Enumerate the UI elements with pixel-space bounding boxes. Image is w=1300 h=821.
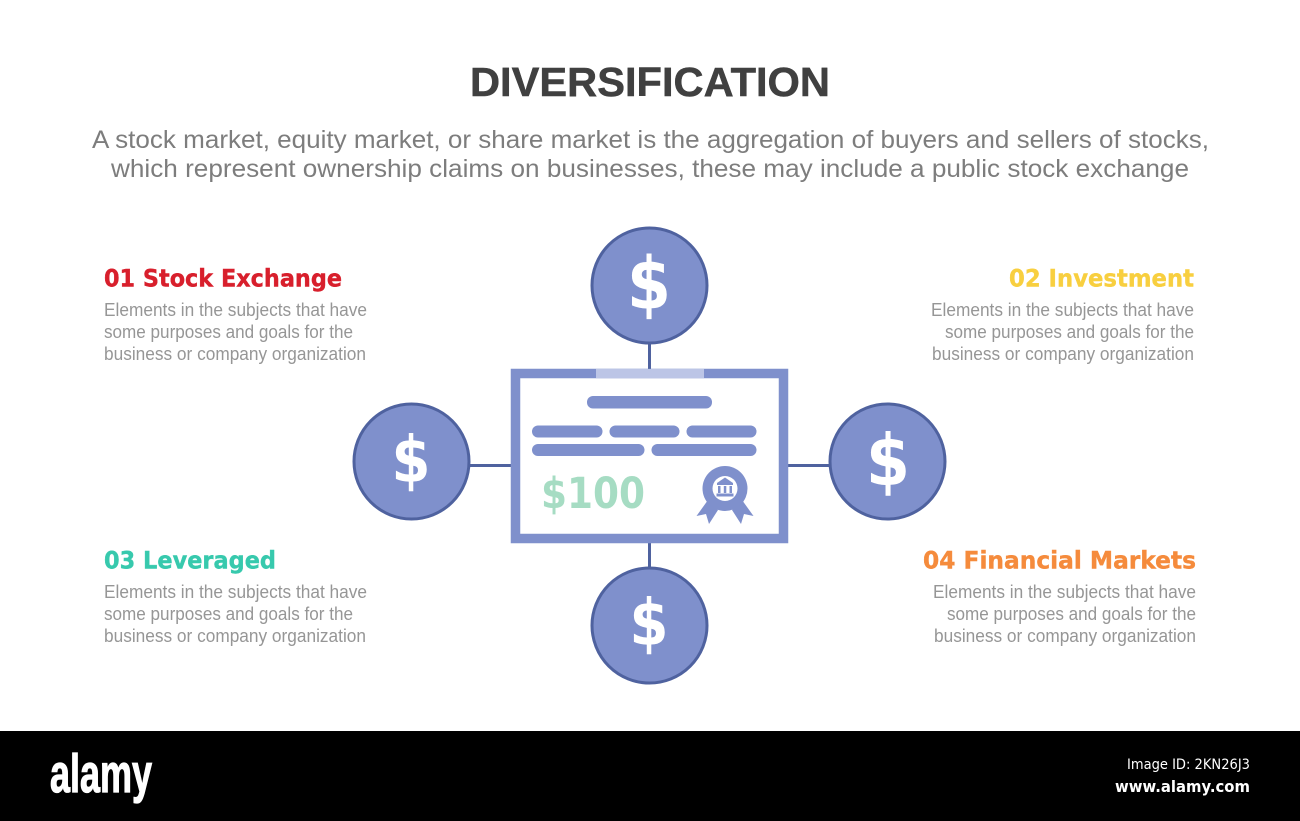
connector lines [470,343,830,567]
footer logo: alamy [50,744,152,804]
panel: 03 Leveraged [104,546,367,646]
panel: 04 Financial Markets [923,546,1196,646]
panel: 01 Stock Exchange: business or company organization [104,344,366,364]
icon: right dollar coin [830,404,945,519]
footer image id: Image ID: 2KN26J3 [1127,757,1250,773]
central stock certificate [516,369,784,538]
subtitle text block: A stock market, equity market, or share market is the aggregation of buyers and sellers of stocks, [92,126,1209,154]
panel: 02 Investment: Elements in the subjects that have [931,300,1194,320]
footer watermark bar [0,731,1300,821]
title: DIVERSIFICATION [470,59,830,105]
panel: 02 Investment [931,264,1194,364]
panel: 01 Stock Exchange: some purposes and goals for the [104,322,353,342]
icon: bottom dollar coin: $ [630,587,668,661]
panel: 01 Stock Exchange [104,264,367,364]
icon: bottom dollar coin [592,568,707,683]
panel: 04 Financial Markets: 04 Financial Markets [923,546,1196,574]
panel: 04 Financial Markets: Elements in the subjects that have [933,582,1196,602]
icon: top dollar coin: $ [627,242,671,326]
subtitle text block: which represent ownership claims on businesses, these may include a public stock exchange [110,155,1189,183]
certificate amount: $100 [541,469,645,519]
panel: 03 Leveraged: 03 Leveraged [104,546,276,574]
panel: 02 Investment: business or company organization [932,344,1194,364]
panel: 03 Leveraged: business or company organization [104,626,366,646]
panel: 01 Stock Exchange: 01 Stock Exchange [104,264,342,292]
subtitle text block [92,126,1209,183]
panel: 02 Investment: 02 Investment [1009,264,1194,292]
panel: 04 Financial Markets: business or company organization [934,626,1196,646]
certificate text bars [532,396,756,456]
panel: 02 Investment: some purposes and goals for the [945,322,1194,342]
panel: 01 Stock Exchange: Elements in the subjects that have [104,300,367,320]
icon: right dollar coin: $ [866,420,910,502]
footer url: www.alamy.com [1115,777,1250,796]
panel: 03 Leveraged: Elements in the subjects that have [104,582,367,602]
panel: 04 Financial Markets: some purposes and goals for the [947,604,1196,624]
icon: left dollar coin: $ [392,424,430,498]
panel: 03 Leveraged: some purposes and goals for the [104,604,353,624]
icon: bank seal ribbon [696,466,754,524]
icon: top dollar coin [592,228,707,343]
icon: left dollar coin [354,404,469,519]
